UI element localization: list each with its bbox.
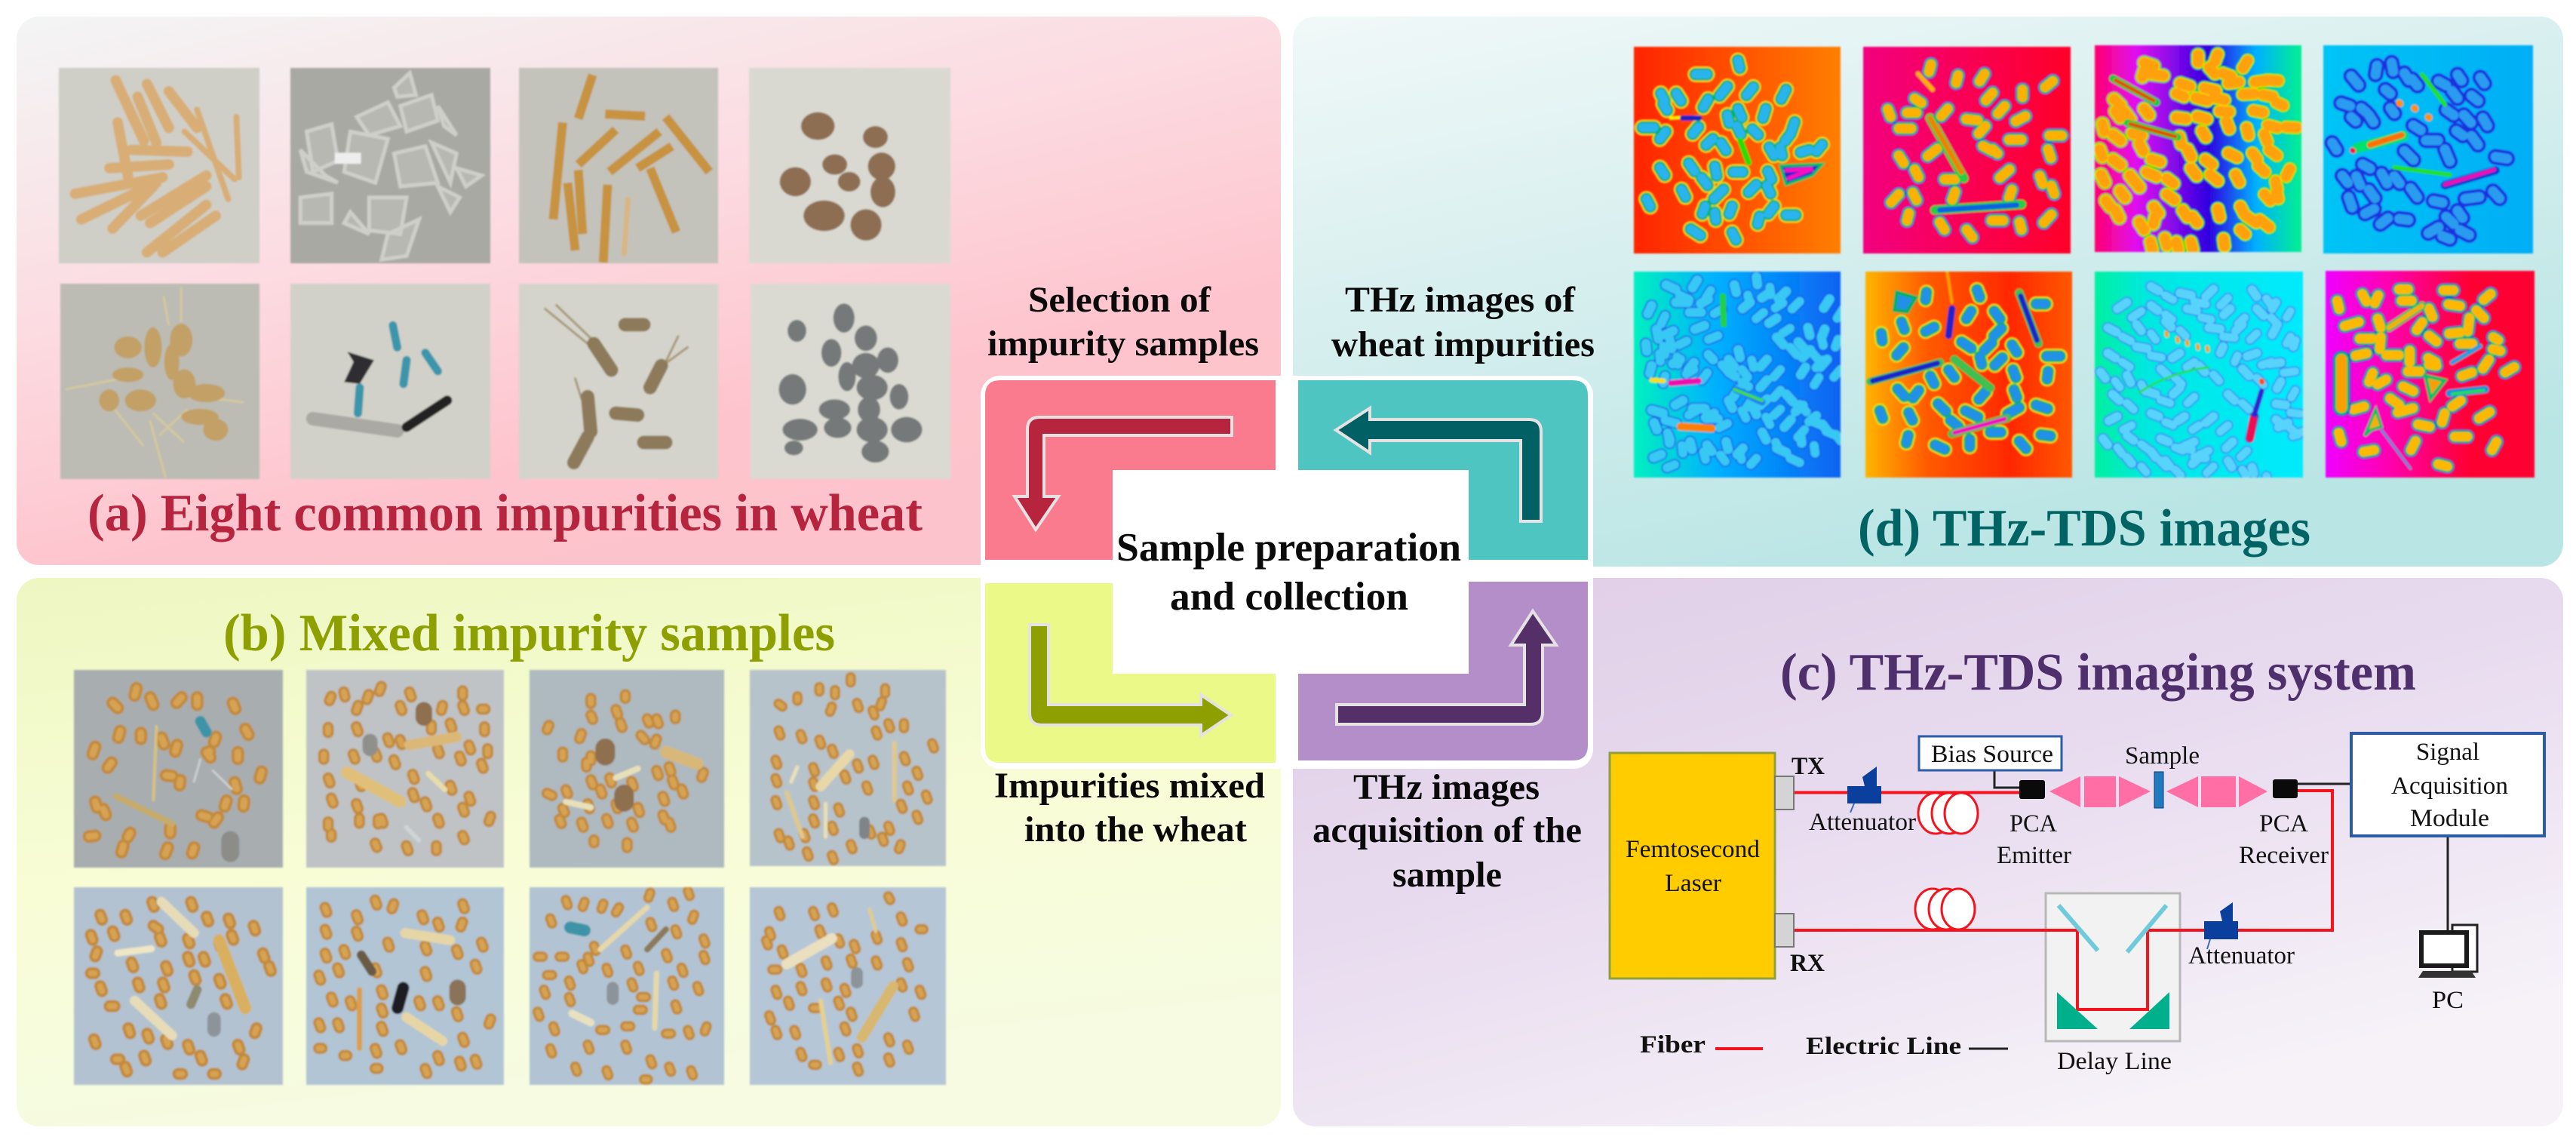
photo: mixed sample 7 xyxy=(528,886,726,1086)
step label: THz images of wheat impurities: THz images of xyxy=(1345,280,1576,320)
photo: brown clods xyxy=(748,67,951,264)
panel: (a) eight common impurities xyxy=(17,17,1281,565)
delay line box xyxy=(2046,893,2180,1041)
THz image grid xyxy=(1634,45,2535,482)
arrow: selection step xyxy=(1015,417,1232,530)
step label: THz images of wheat impurities: wheat impurities xyxy=(1331,324,1595,364)
label: bias source: Bias Source xyxy=(1931,741,2053,768)
photo: mixed sample 8 xyxy=(749,886,947,1086)
label: signal acquisition module: Acquisition xyxy=(2391,773,2508,800)
legend: fiber: Fiber xyxy=(1640,1031,1706,1058)
panel: (d) THz-TDS images xyxy=(1293,17,2563,567)
panel: (c) THz-TDS imaging system xyxy=(1293,578,2563,1126)
label: PC: PC xyxy=(2432,987,2464,1014)
photo: mixed sample 3 xyxy=(528,668,726,869)
central process cycle xyxy=(981,376,1593,769)
center box xyxy=(1113,470,1469,674)
fiber optical path xyxy=(1794,791,2332,1009)
signal acquisition box xyxy=(2351,733,2544,836)
white frame xyxy=(981,376,1593,769)
THz image 5 xyxy=(1634,272,1843,478)
photo: mixed sample 1 xyxy=(72,668,284,869)
label: signal acquisition module: Module xyxy=(2410,805,2489,832)
electric wires xyxy=(1994,770,2448,931)
title: (a): (a) Eight common impurities in wheat xyxy=(88,484,923,542)
step label: selection: Selection of xyxy=(1028,280,1211,320)
step label: selection: impurity samples xyxy=(987,324,1259,364)
photo: wild oat seeds xyxy=(60,283,260,480)
photo: mixed sample 5 xyxy=(72,886,284,1086)
panel: (b) mixed impurity samples xyxy=(17,578,1281,1126)
RX connector xyxy=(1775,914,1794,947)
title: (c): (c) THz-TDS imaging system xyxy=(1780,644,2416,702)
photo: plastic and metal pieces xyxy=(290,283,491,480)
THz image 3 xyxy=(2093,44,2303,253)
arrow: THz images step xyxy=(1336,408,1541,521)
title: (b): (b) Mixed impurity samples xyxy=(223,604,835,662)
delay prisms xyxy=(2057,992,2169,1029)
legend: electric line: Electric Line xyxy=(1806,1033,1961,1060)
bias source box xyxy=(1919,736,2062,770)
label: delay line: Delay Line xyxy=(2057,1048,2172,1075)
fiber coil top xyxy=(1918,793,1978,834)
photo: mixed sample 2 xyxy=(305,669,505,868)
THz beam right xyxy=(2166,776,2267,807)
TX connector xyxy=(1775,776,1794,810)
label: attenuator top: Attenuator xyxy=(1809,809,1916,836)
step label: acquisition: acquisition of the xyxy=(1313,810,1582,850)
THz image 7 xyxy=(2095,272,2310,482)
femtosecond laser box xyxy=(1610,753,1775,979)
THz image 2 xyxy=(1862,45,2072,255)
fiber coil bottom xyxy=(1915,889,1975,929)
THz beam left xyxy=(2049,776,2151,807)
label: TX: TX xyxy=(1792,753,1825,780)
tile: teal xyxy=(1298,380,1588,560)
THz image 8 xyxy=(2326,271,2535,478)
photo: broken glass shards xyxy=(290,66,492,264)
tile: purple xyxy=(1298,582,1588,760)
photo: wheat straw pieces xyxy=(58,67,260,264)
photo: brown seed stubs xyxy=(518,283,719,480)
PCA emitter xyxy=(2019,780,2045,799)
tile: pink xyxy=(985,380,1276,560)
title: (d): (d) THz-TDS images xyxy=(1858,499,2310,558)
tile: yellow xyxy=(985,583,1276,763)
imaging system diagram xyxy=(1610,733,2544,1075)
photo: mixed sample 4 xyxy=(748,669,947,868)
THz image 6 xyxy=(1865,272,2072,478)
PCA receiver xyxy=(2273,779,2298,798)
delay mirrors xyxy=(2059,905,2166,952)
step label: mixing: Impurities mixed xyxy=(994,766,1265,806)
THz image 4 xyxy=(2323,45,2533,253)
mixed wheat sample photographs grid xyxy=(74,670,946,1085)
label: signal acquisition module: Signal xyxy=(2416,739,2479,766)
step label: acquisition: sample xyxy=(1392,855,1502,895)
THz image 1 xyxy=(1632,45,1842,255)
impurity photographs grid xyxy=(59,68,950,479)
arrow: mixing step xyxy=(1030,625,1231,736)
label: femtosecond laser: Laser xyxy=(1665,870,1721,897)
label: sample: Sample xyxy=(2125,742,2200,770)
attenuator bottom xyxy=(2204,902,2238,949)
center label: and collection xyxy=(1170,575,1408,619)
photo: golden straw xyxy=(518,67,719,264)
label: PCA receiver: PCA xyxy=(2259,810,2308,837)
label: PCA emitter: PCA xyxy=(2010,810,2057,837)
label: PCA emitter: Emitter xyxy=(1997,842,2071,869)
label: femtosecond laser: Femtosecond xyxy=(1626,836,1760,863)
step label: mixing: into the wheat xyxy=(1024,810,1247,850)
label: PCA receiver: Receiver xyxy=(2239,842,2329,869)
attenuator top xyxy=(1847,767,1881,813)
step label: acquisition: THz images xyxy=(1353,767,1540,807)
label: RX: RX xyxy=(1790,950,1825,977)
sample plate xyxy=(2154,772,2163,808)
arrow: acquisition step xyxy=(1337,611,1556,724)
label: attenuator bottom: Attenuator xyxy=(2188,942,2295,969)
photo: mixed sample 6 xyxy=(305,886,505,1086)
center label: Sample preparation xyxy=(1116,526,1461,570)
photo: grey stones xyxy=(750,283,951,480)
PC icon xyxy=(2418,925,2477,978)
